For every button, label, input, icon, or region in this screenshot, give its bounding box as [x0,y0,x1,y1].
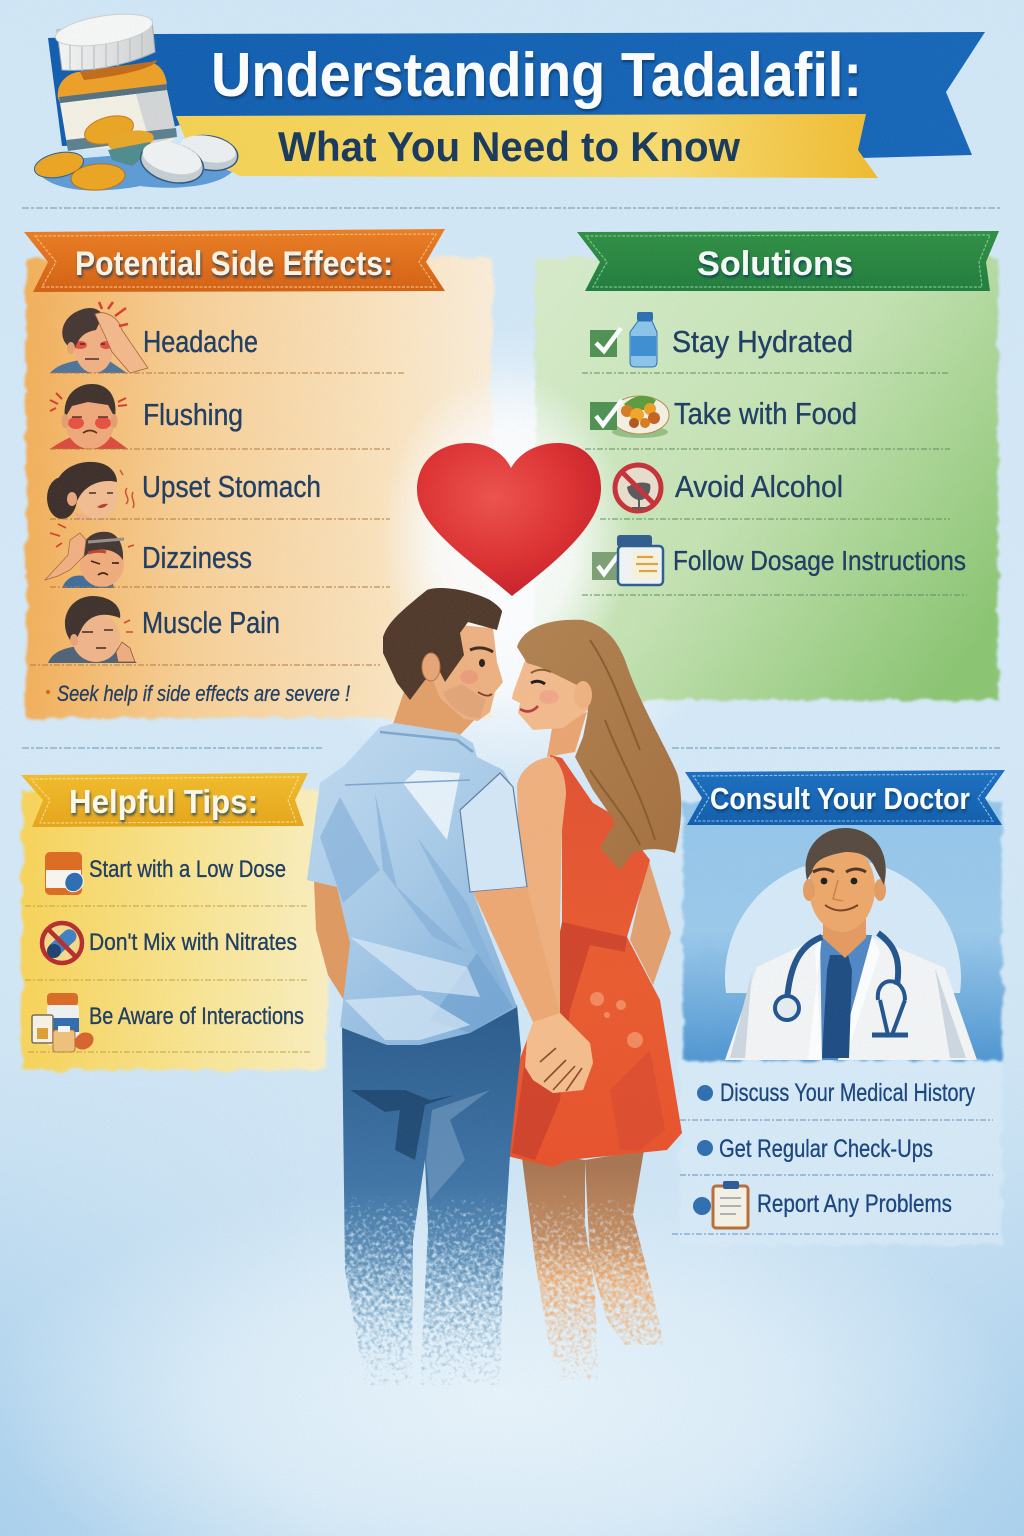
label: nitrates: Don't Mix with Nitrates [89,929,297,956]
woman face [512,660,588,730]
woman near arm [517,757,566,1015]
label: avoid alcohol: Avoid Alcohol [675,469,843,504]
background [0,1101,1024,1536]
panel: potential side effects [24,229,445,706]
panel: solutions background [535,258,998,700]
subtitle text: What You Need to Know [278,123,740,170]
woman legs [521,1150,664,1380]
bullet: check-ups: Get Regular Check-Ups [719,1135,933,1163]
panel: consult doctor lower background [680,1050,1002,1245]
heading ribbon: helpful tips [21,773,308,827]
icon: upset stomach [47,462,134,520]
panel: potential side effects background [26,258,492,718]
man face [428,625,503,721]
icon: heart [417,443,601,596]
doctor coat [725,936,977,1060]
illustration: couple [307,588,682,1385]
doctor neck and head [823,915,866,958]
man ear and features [422,653,440,681]
doctor row dividers [672,1120,998,1234]
tips row dividers [25,906,310,1052]
man shirt [307,723,527,1045]
icon: follow dosage [592,535,663,585]
glow over panels near heart [380,370,630,710]
panel: helpful tips background [22,790,328,1070]
bullet: report problems [693,1181,952,1228]
heading ribbon: solutions: Solutions [697,245,853,283]
man far arm [314,880,352,1002]
panel: consult your doctor [683,770,1005,1228]
title text: Understanding Tadalafil: [211,41,862,110]
heading ribbon: helpful tips: Helpful Tips: [69,783,258,820]
label: upset stomach: Upset Stomach [142,469,321,504]
label: muscle pain: Muscle Pain [142,605,280,640]
icon: flushing [50,384,128,449]
heading ribbon: solutions [577,231,999,291]
man jeans [342,1005,521,1385]
label: interactions: Be Aware of Interactions [89,1003,304,1030]
blue title ribbon [48,32,985,158]
label: take with food: Take with Food [674,396,857,431]
man hair [383,588,502,700]
icon: stay hydrated [590,312,657,367]
panel: helpful tips [21,773,308,1053]
icon: muscle pain [48,596,137,663]
icon: dizziness [45,524,134,588]
label: flushing: Flushing [143,397,243,432]
icon: take with food [590,396,669,438]
yellow subtitle ribbon [176,114,878,178]
label: start low: Start with a Low Dose [89,856,286,883]
icon: pill bottle and tablets [32,9,241,192]
woman hair [517,620,681,870]
icon: headache [50,302,148,373]
solutions row dividers [582,373,967,595]
icon: interactions [32,993,97,1053]
heading ribbon: consult your doctor: Consult Your Doctor [710,781,970,816]
label: follow dosage: Follow Dosage Instructions [673,545,966,576]
panel: solutions [577,231,999,585]
stethoscope [787,933,898,1000]
bullet: report problems: Report Any Problems [757,1190,952,1218]
side effects row dividers [30,373,405,665]
woman dress [503,755,682,1167]
heading ribbon: potential side effects: Potential Side Effects: [75,245,393,283]
man near arm and joined hands [473,887,593,1093]
label: stay hydrated: Stay Hydrated [672,324,853,359]
heading ribbon: potential side effects [24,229,445,292]
note: seek help: Seek help if side effects are severe ! [57,681,350,706]
woman [503,620,682,1380]
woman neck [547,712,587,757]
icon: no nitrates [42,923,82,963]
doctor illustration panel [683,802,1002,1060]
label: headache: Headache [143,324,258,359]
section dividers [22,208,1002,748]
icon: avoid alcohol [615,465,661,511]
man [307,588,593,1385]
woman far arm [630,858,671,985]
glow behind heart [270,330,750,790]
title banner [32,9,985,192]
icon: low dose jar [45,852,87,895]
label: dizziness: Dizziness [142,540,252,575]
man neck [392,668,482,735]
heading ribbon: consult your doctor [685,770,1005,825]
woman ear and features [574,681,592,709]
